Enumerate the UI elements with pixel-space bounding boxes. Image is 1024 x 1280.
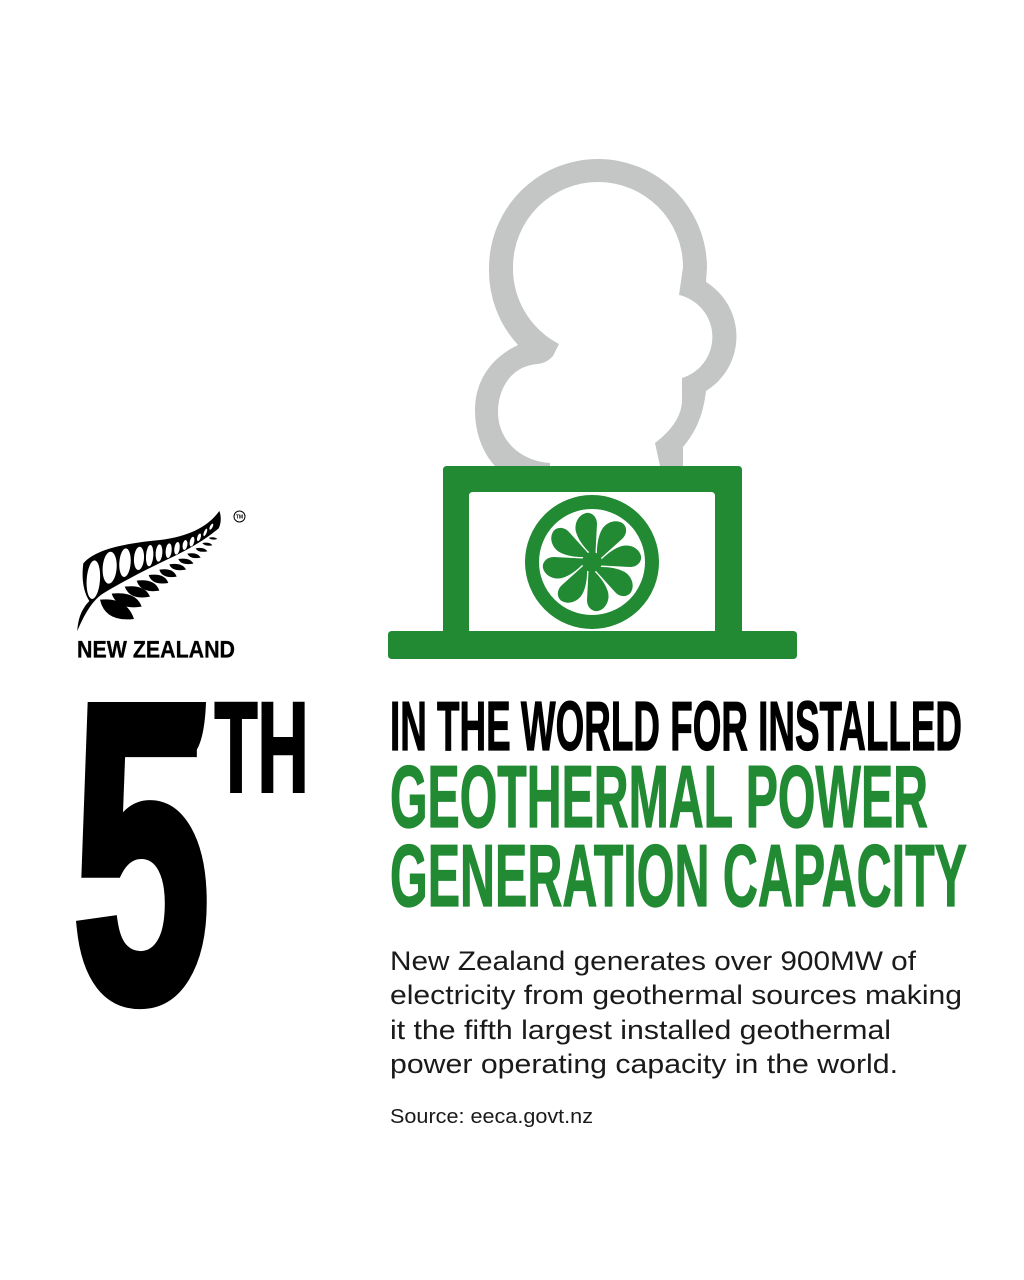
body text: it the fifth largest installed geothermal: [390, 1015, 891, 1045]
turbine blades: [543, 513, 641, 611]
turbine ring: [532, 502, 652, 622]
icon: geothermal power station: [388, 466, 797, 659]
headline: [390, 687, 967, 925]
body text: power operating capacity in the world.: [390, 1049, 898, 1079]
body text: New Zealand generates over 900MW of: [390, 946, 917, 976]
trademark symbol: TM: [236, 514, 243, 520]
big numeral 5: 5: [72, 617, 210, 1089]
ordinal suffix TH: TH: [214, 676, 308, 820]
station building: [443, 466, 742, 632]
fern: [77, 511, 221, 631]
station base: [388, 631, 797, 659]
source note: Source: eeca.govt.nz: [390, 1106, 593, 1128]
trademark symbol: [234, 511, 245, 522]
icon: steam cloud: [475, 159, 736, 466]
logo: New Zealand fern mark: [77, 511, 245, 664]
logo wordmark: NEW ZEALAND: [77, 636, 235, 664]
body text: electricity from geothermal sources making: [390, 980, 962, 1010]
body text: [390, 946, 962, 1079]
